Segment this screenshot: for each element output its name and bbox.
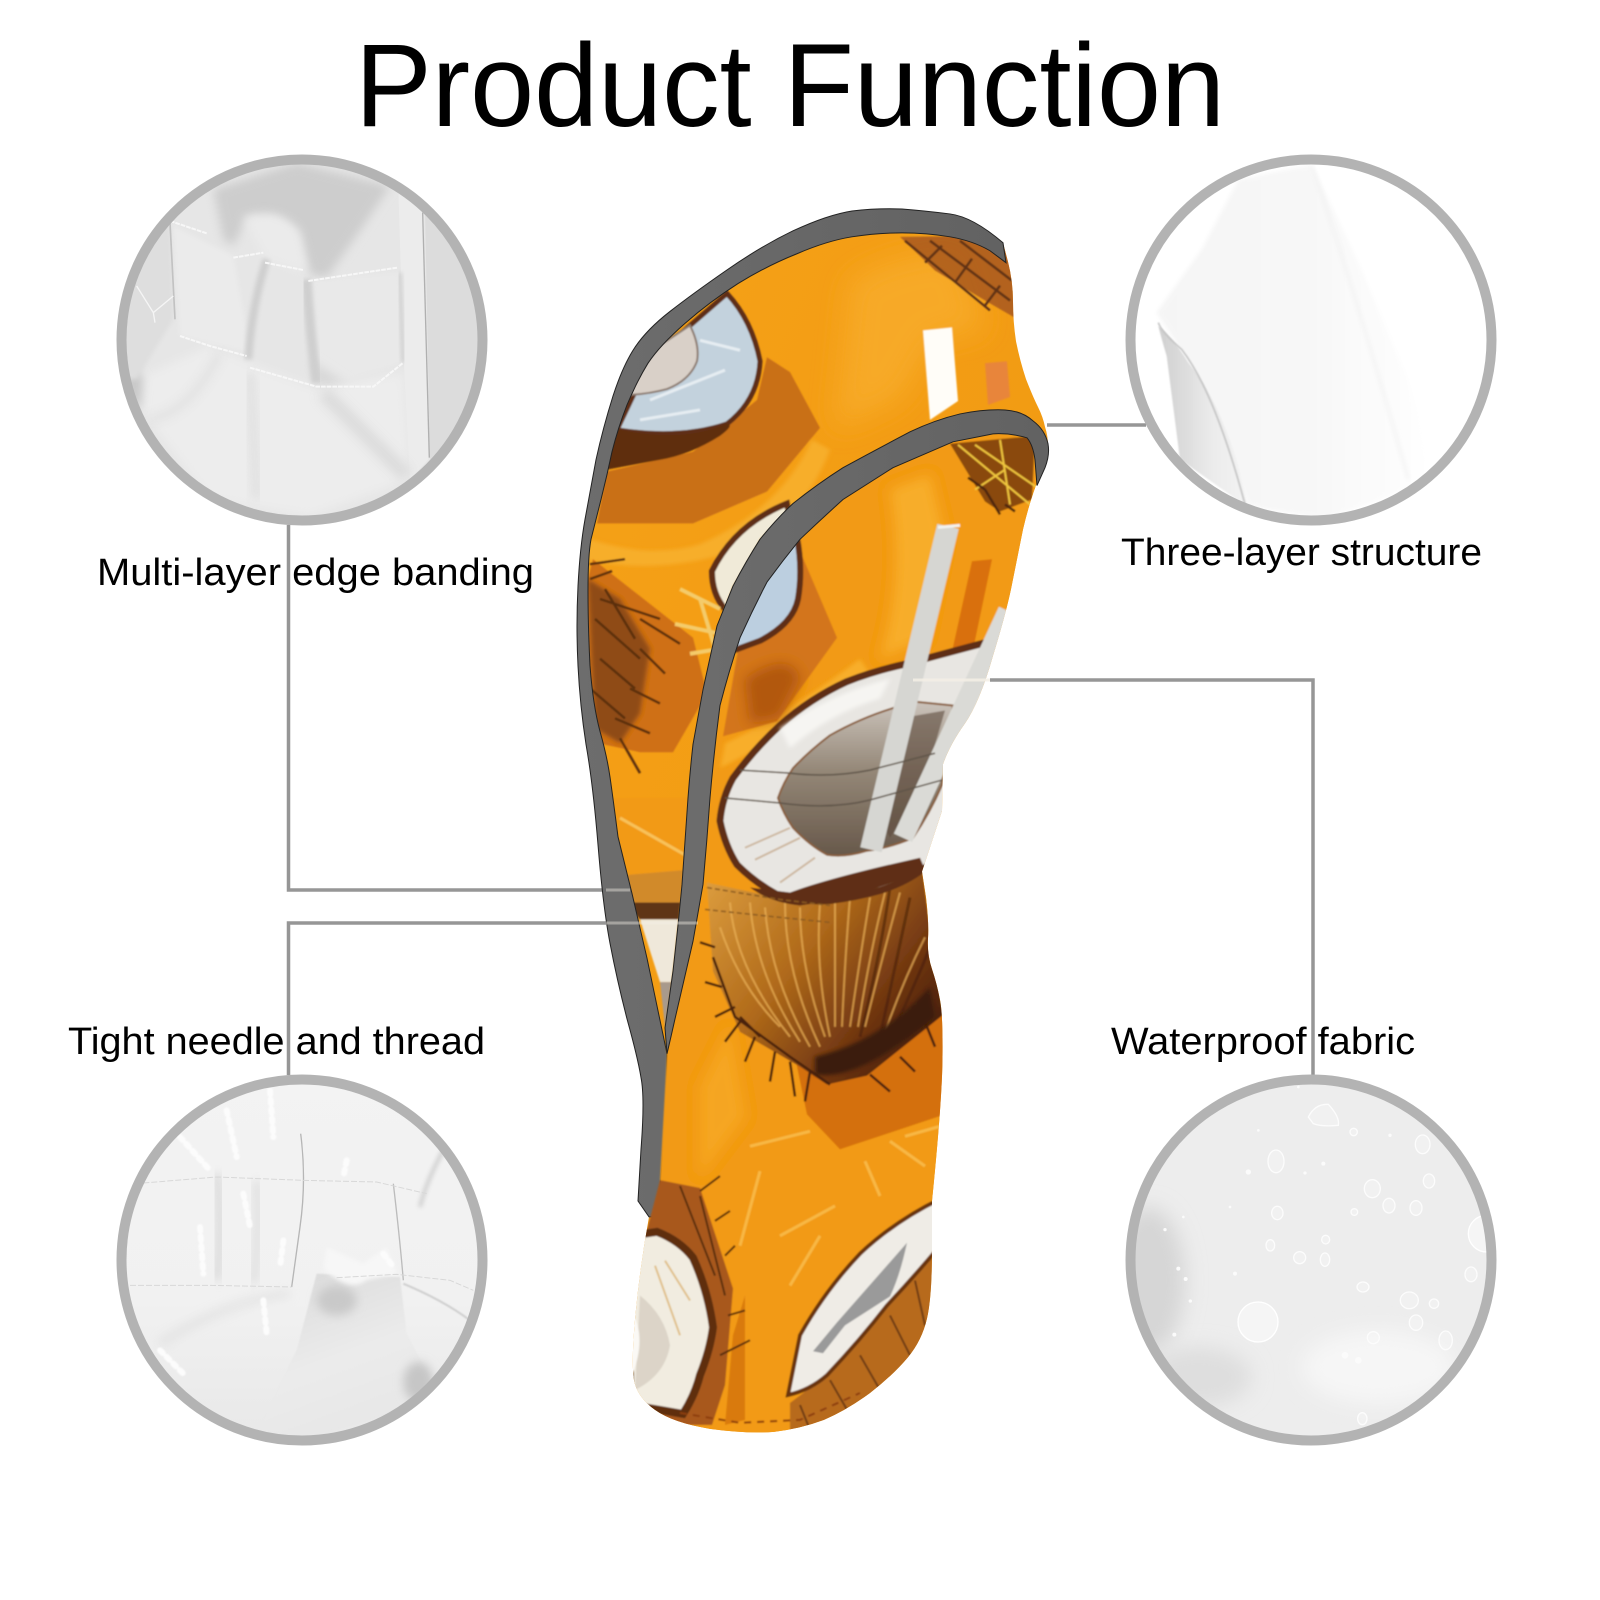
edge fold [1312,166,1408,479]
label: waterproof fabric: Waterproof fabric [1111,1021,1415,1063]
lower dark orange shape [795,1007,945,1149]
large coconut husk [700,868,943,1101]
small speckles [1163,1086,1392,1364]
lower right panel [257,1274,433,1437]
shadow at lower right [403,1362,433,1402]
shadow below bump [317,1285,357,1315]
faint connector traces over product [606,680,990,923]
stitch lines [170,221,403,387]
coconut husk on hood left [588,559,680,773]
title: Product Function [355,20,1225,152]
coconut shell white flesh [716,639,984,906]
connector lines [288,425,1313,1075]
lower right coconut husk [790,1254,940,1435]
right vertical strip [422,212,478,459]
vertical creases [160,1134,470,1344]
stitch lines [130,1177,473,1290]
product: golf club head cover with coconut print [576,208,1050,1432]
detail circle: multi-layer edge banding [110,146,500,536]
coconut cavity [778,701,953,856]
lower left coconut husk [647,1174,751,1426]
husk top right of hood [900,236,1016,318]
label: tight needle and thread: Tight needle and thread [68,1021,485,1063]
orange straw top [985,361,1010,405]
water drops [1266,1104,1477,1425]
large water drops [1238,1215,1505,1342]
coconut on hood [607,294,760,470]
orange straw [952,559,992,652]
cover base fabric [588,233,1048,1432]
left panel shading [128,224,176,380]
circle ring [122,1080,482,1440]
coconut husk on front top right [950,436,1040,514]
label: multi-layer edge banding: Multi-layer edge banding [97,552,534,594]
front panel fabric [659,437,1036,1432]
circle ring [122,160,482,520]
circle ring [1130,1080,1492,1440]
lower hood strip print [610,798,700,1027]
bottom stitch line [680,1393,860,1423]
soft fold shading [123,163,410,516]
seam stitches on front [705,888,830,922]
fold seam shading [1158,326,1248,508]
lower right coconut flesh [788,1199,940,1395]
fabric shading [1112,1207,1455,1407]
dark orange shape on front [723,539,837,736]
label: three-layer structure: Three-layer structure [1121,532,1482,574]
front panel and print [632,436,1036,1432]
front panel binding band [665,410,1049,1054]
light rays on orange [740,1126,940,1286]
hood print [570,236,1016,1027]
seam line [1158,323,1245,504]
hood binding band [577,209,1006,1217]
white straw top [923,327,958,420]
detail circle: three-layer structure [1125,146,1515,536]
central fold shadows [150,259,407,499]
circle ring [1130,160,1492,520]
torn seam lines over coconut [725,753,942,806]
glossy highlights [160,1090,393,1374]
lower left coconut flesh [628,1232,713,1414]
small coconut on hood [675,503,798,654]
lighter bands on front [700,475,945,1176]
small coconut continuation on front [725,537,800,654]
bump highlight [323,1247,397,1285]
infographic canvas [68,40,1496,1446]
detail circle: tight needle and thread [110,1067,500,1457]
detail circle: waterproof fabric with water drops [1112,1067,1515,1457]
drinking straws [871,525,1008,850]
fabric body [1160,180,1262,504]
